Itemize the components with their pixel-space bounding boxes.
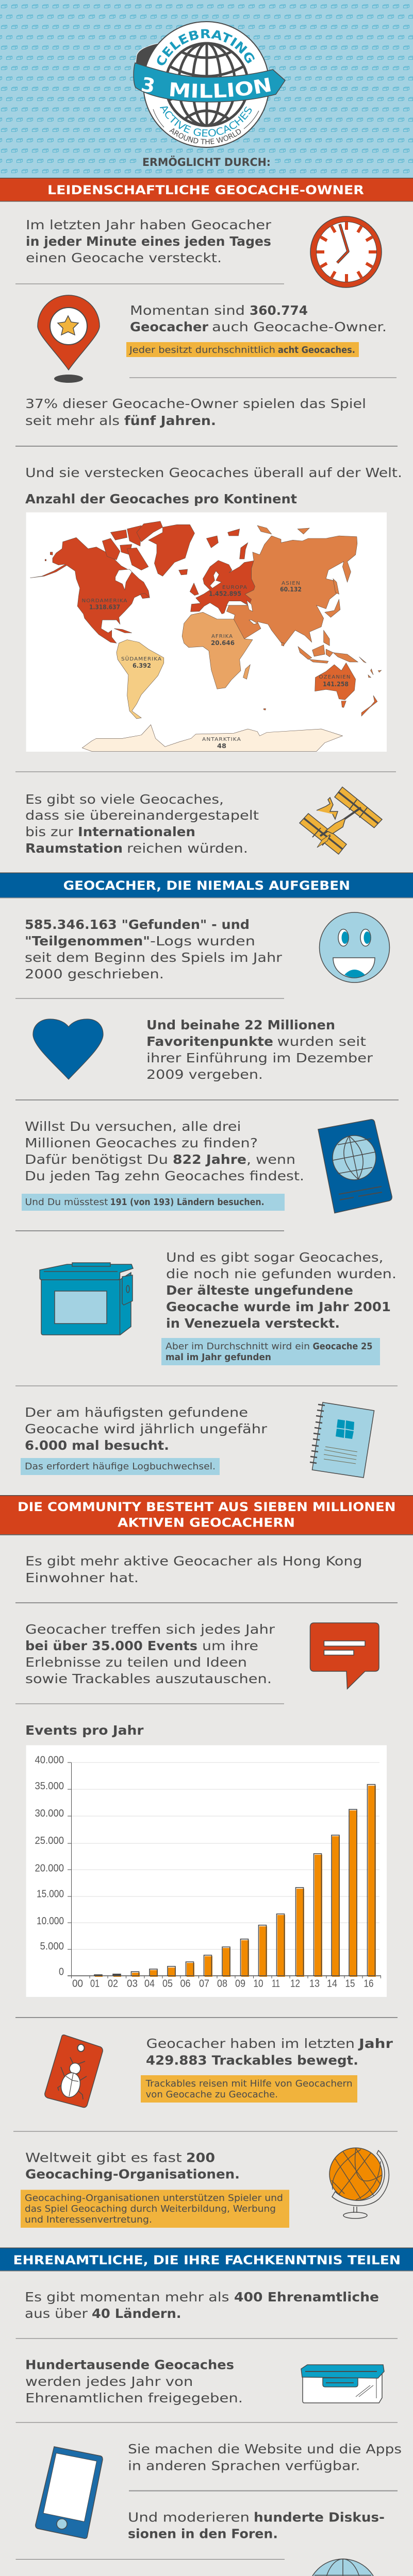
text: hides per minute [26,217,272,265]
text: 37 percent: fünf Jahren. [124,413,216,428]
text: volunteers [25,2290,379,2321]
icon: speech bubble [310,1623,379,1689]
section band: Geocacher, die niemals aufgeben [0,873,413,899]
section band: Ehrenamtliche [0,2247,413,2271]
text: owners count: Geocacher [130,319,209,334]
text: trackables: 429.883 Trackables bewegt. [146,2053,358,2068]
curved text: Active Geocaches: ACTIVE GEOCACHES [160,106,252,137]
text: never found: die noch nie gefunden wurden. [166,1266,397,1281]
y axis labels: 40.000 [35,1755,64,1766]
y axis labels: 0 [59,1966,64,1977]
text: 822 years: Willst Du versuchen, alle drei [25,1119,241,1134]
bars [95,1786,376,1977]
callout: eight geocaches [126,342,359,357]
icon: clock [310,216,382,287]
text: languages: Sie machen die Website und die Apps [128,2442,402,2456]
y axis labels: 20.000 [35,1863,64,1874]
icon: trackable tag with bug [45,2035,103,2107]
header: logo on patterned background [0,0,413,178]
icon: clear box container [301,2365,384,2403]
callout: eight geocaches: acht Geocaches. [278,345,355,355]
x axis labels: 10 [254,1978,263,1990]
map labels [81,581,351,750]
callout: organisations support: und Interessenvertretung. [25,2215,152,2225]
map labels: ASIEN [282,581,301,586]
text: forums: sionen in den Foren. [128,2527,278,2541]
text: organisations [25,2150,240,2182]
asia [226,526,382,677]
text: Hong Kong [25,1554,362,1585]
y axis labels [35,1755,64,1977]
text: trackables [146,2036,393,2068]
callout: organisations support: Geocaching-Organisationen unterstützen Spieler und [25,2193,283,2204]
ribbon [134,63,285,102]
text: owners count: Momentan sind [130,303,245,318]
x axis labels: 02 [108,1978,118,1990]
text: published caches [25,2358,243,2405]
icon: heart [33,1019,103,1079]
text: 37 percent [25,396,366,428]
text: 37 percent: seit mehr als [25,413,120,428]
x axis labels: 15 [345,1978,355,1990]
callout: trackables travel [141,2075,357,2103]
text: forums [128,2510,385,2541]
x axis labels: 14 [327,1978,337,1990]
text: organisations: Weltweit gibt es fast [25,2150,182,2165]
text: forums: hunderte Diskus- [254,2510,385,2524]
text: logs: seit dem Beginn des Spiels im Jahr [25,950,283,965]
x axis labels: 07 [199,1978,209,1990]
text: Hong Kong: Es gibt mehr aktive Geocacher als Hong Kong [25,1554,362,1568]
text: volunteers: Es gibt momentan mehr als [25,2290,229,2304]
subtitle: ERMÖGLICHT DURCH: [142,156,271,168]
map labels: OZEANIEN [319,674,351,680]
text: events: Geocacher treffen sich jedes Jahr [25,1622,275,1637]
callout: found 25 times: Aber im Durchschnitt wird ein [166,1342,310,1352]
y axis labels: 15.000 [37,1889,64,1900]
text: never found: in Venezuela versteckt. [166,1316,340,1331]
icon: map pin with star [38,295,100,383]
text: never found [166,1250,397,1331]
text: 822 years: Dafür benötigst Du [25,1152,168,1167]
text: volunteers: aus über [25,2306,88,2321]
callout: trackables travel: von Geocache zu Geocache. [146,2090,278,2100]
map labels: EUROPA [222,585,247,590]
section band: Leidenschaftliche Geocache-Owner [0,178,413,202]
x axis labels: 13 [309,1978,320,1990]
text: organisations: Geocaching-Organisationen. [25,2167,240,2182]
text: 822 years: Du jeden Tag zehn Geocaches findest. [25,1168,304,1183]
text: published caches: werden jedes Jahr von [25,2374,193,2389]
caspian and gulf [246,600,253,612]
map labels: 48 [217,742,226,750]
section band: Leidenschaftliche Geocache-Owner: LEIDENSCHAFTLICHE GEOCACHE-OWNER [47,183,364,197]
icon: passport [318,1120,392,1213]
curved text: Celebrating: CELEBRATING [157,29,255,65]
text: most found [25,1405,268,1453]
map labels: 1.452.895 [209,590,241,598]
map labels: NORDAMERIKA [81,598,128,604]
icon: notebook [310,1402,374,1478]
hudson bay [115,569,132,590]
y axis labels: 10.000 [37,1916,64,1927]
callout: found 25 times: Geocache 25 [312,1342,372,1352]
text: trackables: Geocacher haben im letzten [146,2036,355,2051]
text: logs: 2000 geschrieben. [25,967,164,981]
icon: smartphone [36,2447,103,2538]
callout: organisations support [21,2190,289,2228]
bar chart: events per year [26,1745,387,1997]
text: forums: Und moderieren [128,2510,250,2524]
badge: Celebrating 3 Million [133,21,286,148]
antarctica [82,725,342,751]
oceania [263,663,377,716]
callout: found 25 times: mal im Jahr gefunden [166,1352,271,1363]
text: languages [128,2442,402,2473]
x axis labels: 05 [162,1978,173,1990]
x axis labels: 06 [180,1978,191,1990]
text: most found: 6.000 mal besucht. [25,1438,169,1453]
text: owners count: 360.774 [250,303,308,318]
section band: Die Community: DIE COMMUNITY BESTEHT AUS SIEBEN MILLIONEN [18,1500,395,1514]
text: events: um ihre [202,1638,258,1653]
map labels: 60.132 [280,586,302,593]
text: favorite points: ihrer Einführung im Dezember [146,1050,373,1065]
text: events: bei über 35.000 Events [25,1638,197,1653]
x axis labels: 00 [72,1978,83,1990]
text: events: sowie Trackables auszutauschen. [25,1671,272,1686]
x axis labels [72,1978,373,1990]
callout: trackables travel: Trackables reisen mit Hilfe von Geocachern [145,2079,353,2089]
callout: organisations support: das Spiel Geocaching durch Weiterbildung, Werbung [25,2204,276,2214]
heading: map: Anzahl der Geocaches pro Kontinent [25,492,297,506]
x axis labels: 11 [272,1978,280,1990]
text: languages: in anderen Sprachen verfügbar. [128,2459,360,2473]
icon: ammo can [40,1263,133,1335]
icon: desk globe [329,2148,389,2218]
text: events [25,1622,275,1686]
text: organisations: 200 [186,2150,215,2165]
map labels: 141.258 [323,681,349,688]
text: hidden everywhere: Und sie verstecken Geocaches überall auf der Welt. [25,465,402,480]
x axis labels: 12 [290,1978,300,1990]
text: space station: dass sie übereinandergestapelt [25,808,259,823]
map labels: 6.392 [133,662,151,669]
text: favorite points: Und beinahe 22 Millionen [146,1018,335,1032]
text: most found: Der am häufigsten gefundene [25,1405,248,1420]
text: space station: reichen würden. [127,841,248,856]
north america [30,521,162,643]
greenland [148,524,194,576]
text: 822 years: , wenn [246,1152,295,1167]
text: logs: 585.346.163 "Gefunden" - und [25,917,250,932]
text: favorite points: 2009 vergeben. [146,1067,263,1082]
map labels: 20.646 [211,639,235,647]
africa [182,612,253,689]
text: logs: -Logs wurden [150,934,255,948]
text: events: Erlebnisse zu teilen und Ideen [25,1655,247,1670]
text: published caches: Hundertausende Geocaches [25,2358,234,2372]
callout: eight geocaches: Jeder besitzt durchschnittlich [129,345,275,355]
icon: space station [300,787,382,854]
gridlines and axes [68,1762,381,1978]
text: 822 years: 822 Jahre [173,1152,246,1167]
callout: logbook [21,1458,220,1475]
baltic and black sea [210,571,221,588]
text: never found: Geocache wurde im Jahr 2001 [166,1299,391,1314]
curved text: Around the World: AROUND THE WORLD [169,128,241,144]
text: hides per minute: Im letzten Jahr haben Geocacher [26,217,272,232]
map labels: ANTARKTIKA [202,737,241,742]
callout: countries: 191 (von 193) Ländern besuchen. [110,1197,265,1208]
x axis labels: 01 [90,1978,100,1990]
x axis labels: 08 [217,1978,227,1990]
world map panel [26,512,387,752]
icon: smiley [320,912,390,982]
section band: Die Community [0,1495,413,1535]
map labels: 1.318.637 [89,604,120,611]
europe [179,529,255,614]
text: space station [25,792,259,856]
map labels: AFRIKA [211,634,233,639]
text: volunteers: 40 Ländern. [92,2306,181,2321]
section band: Geocacher, die niemals aufgeben: GEOCACHER, DIE NIEMALS AUFGEBEN [63,878,350,893]
text: owners count: auch Geocache-Owner. [212,319,387,334]
ribbon text: 3: 3 [139,73,157,97]
text: Hong Kong: Einwohner hat. [25,1570,139,1585]
x axis labels: 04 [144,1978,155,1990]
map shapes [30,521,382,751]
text: trackables: Jahr [358,2036,393,2051]
text: 822 years: Millionen Geocaches zu finden? [25,1136,258,1150]
y axis labels: 5.000 [40,1941,64,1952]
callout: countries: Und Du müsstest [25,1197,108,1208]
ribbon text: Million: MILLION [170,77,271,98]
text: space station: Es gibt so viele Geocaches, [25,792,224,807]
text: 37 percent: 37% dieser Geocache-Owner spielen das Spiel [25,396,366,411]
heading: events chart: Events pro Jahr [25,1723,144,1738]
text: logs: "Teilgenommen" [25,934,150,948]
x axis labels: 03 [127,1978,138,1990]
text: owners count [130,303,387,334]
text: hides per minute: einen Geocache versteckt. [26,250,222,265]
south america [117,640,164,719]
text: favorite points: Favoritenpunkte [146,1034,273,1049]
text: logs [25,917,283,981]
section band: Ehrenamtliche: EHRENAMTLICHE, DIE IHRE FACHKENNTNIS TEILEN [13,2253,401,2267]
callout: countries [22,1194,285,1211]
text: favorite points [146,1018,373,1082]
text: space station: Internationalen [78,824,195,839]
callout: logbook: Das erfordert häufige Logbuchwechsel. [25,1462,216,1472]
text: never found: Der älteste ungefundene [166,1283,353,1298]
text: hides per minute: in jeder Minute eines jeden Tages [26,234,271,249]
text: space station: Raumstation [25,841,123,856]
text: space station: bis zur [25,824,74,839]
x axis labels: 16 [364,1978,373,1990]
y axis labels: 30.000 [35,1808,64,1819]
text: published caches: Ehrenamtlichen freigegeben. [25,2391,243,2405]
y axis labels: 35.000 [35,1781,64,1792]
callout: found 25 times [161,1338,380,1365]
text: 822 years [25,1119,304,1183]
text: most found: Geocache wird jährlich ungefähr [25,1421,268,1436]
x axis labels: 09 [235,1978,245,1990]
globe graphic [166,43,248,126]
map labels: SÜDAMERIKA [121,655,162,662]
y axis labels: 25.000 [35,1835,64,1846]
text: favorite points: wurden seit [277,1034,366,1049]
text: volunteers: 400 Ehrenamtliche [234,2290,379,2304]
section band: Die Community: AKTIVEN GEOCACHERN [118,1516,295,1530]
icon: globe [307,2559,378,2576]
text: never found: Und es gibt sogar Geocaches, [166,1250,384,1265]
